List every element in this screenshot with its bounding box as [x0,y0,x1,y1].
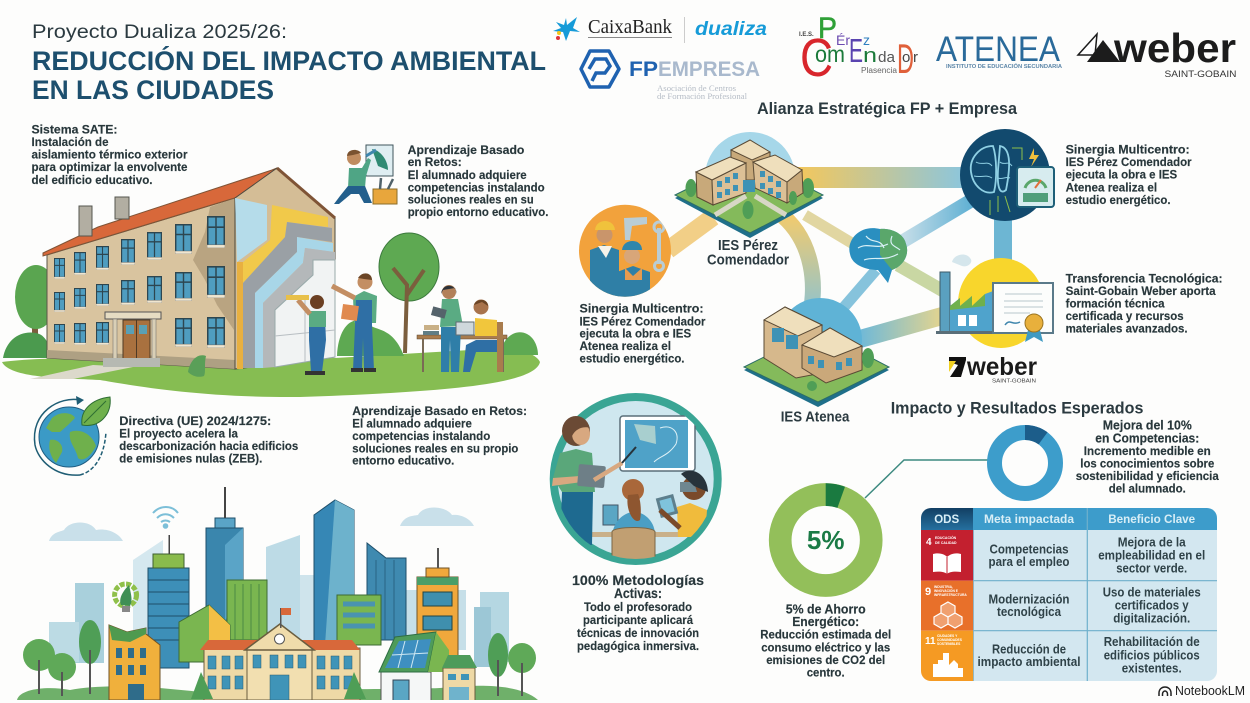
text: 100% Metodologías Activas: participante aplicará [583,613,693,627]
logo: IES Pérez Comendador: om [815,41,845,67]
label: IES Atenea: IES Atenea [781,409,850,426]
table column: Beneficio Clave: Rehabilitación de [1104,635,1200,649]
icon: worker installing panel [334,145,397,204]
green mid buildings [227,580,381,645]
ODS 11 cell [921,631,974,682]
text: 100% Metodologías Activas: técnicas de innovación [577,626,699,640]
label: IES Pérez Comendador: Comendador [707,252,789,268]
chart: 5% energy saving donut [780,483,871,586]
table column: Beneficio Clave: existentes. [1122,661,1182,675]
text: Sistema SATE: Instalación de [32,135,109,149]
text: 100% Metodologías Activas: 100% Metodologías [572,572,704,588]
icon: gear with bulb [115,584,137,612]
logo: IES Pérez Comendador: E [849,32,863,69]
gable end with insulation layers [235,168,335,369]
label: IES Pérez Comendador [707,237,789,268]
ODS 9 cell: INNOVACIÓN E [934,588,959,593]
text: Aprendizaje Basado en Retos (top) [408,143,548,219]
text: Aprendizaje Basado en Retos (bottom): soluciones reales en su propio [352,441,518,455]
logo: IES Pérez Comendador: C [800,28,833,88]
ODS 9 cell: 9 [925,586,931,598]
logo: IES Pérez Comendador: Plasencia [861,66,898,75]
ODS 11 cell: COMUNIDADES [937,638,963,642]
wall base band [47,350,235,369]
logo: CaixaBank dualiza: CaixaBank [588,16,672,38]
title [32,21,546,105]
heading: Impacto y Resultados: Impacto y Resultados Esperados [891,398,1143,417]
ODS 11 cell: CIUDADES Y [937,634,958,638]
text: Transferencia Tecnológica: Saint-Gobain Weber aporta [1066,284,1216,298]
illustration: green city skyline [17,487,538,702]
ODS 11 cell: SOSTENIBLES [937,642,961,646]
logo: FP Empresa: de Formación Profesional [657,91,748,101]
logo: IES Pérez Comendador: D [897,35,914,82]
teacher [552,416,636,492]
text: Directiva UE: de emisiones nulas (ZEB). [119,452,262,466]
table header [934,512,1196,526]
table column: Beneficio Clave: Mejora de la [1118,536,1187,550]
text: Sistema SATE: para optimizar la envolvente [32,160,188,174]
logo: IES Atenea: INSTITUTO DE EDUCACIÓN SECUNDARIA [946,62,1062,70]
NotebookLM mark: NotebookLM [1175,683,1245,698]
small house [442,655,477,702]
front wall [47,198,235,369]
table column: Beneficio Clave: Uso de materiales [1103,586,1201,600]
icon: construction workers [579,205,671,300]
text: Aprendizaje Basado en Retos (top): competencias instalando [408,181,545,195]
logo: Weber small: weber [966,353,1037,381]
text: Sinergia Multicentro (right): Sinergia Multicentro: [1066,142,1190,156]
logo: IES Pérez Comendador [799,12,918,88]
logo: FP Empresa: EMPRESA [658,58,760,81]
label: IES Pérez Comendador: IES Pérez [718,237,778,254]
table column: Beneficio Clave: digitalización. [1113,612,1190,626]
text: Aprendizaje Basado en Retos (bottom): El alumnado adquiere [352,416,472,430]
icon: IES Atenea school [744,298,889,407]
table column: Beneficio Clave: edificios públicos [1104,648,1200,662]
heading: Alianza Estratégica: Alianza Estratégica FP + Empresa [757,99,1018,118]
text: Sinergia Multicentro (right) [1066,142,1192,207]
background buildings [49,535,509,667]
text: Mejora del 10%: Incremento medible en [1084,444,1211,458]
table column: Meta impactada: tecnológica [997,605,1062,619]
text: Transferencia Tecnológica [1066,271,1223,335]
title: REDUCCIÓN DEL IMPACTO AMBIENTAL [32,46,546,76]
text: Mejora del 10%: del alumnado. [1109,482,1186,496]
table column: Beneficio Clave: certificados y [1115,598,1189,612]
connector line between donuts [865,460,988,498]
logo: IES Pérez Comendador: I.E.S. [799,32,814,38]
rubble [188,355,206,377]
logo: Weber small: SAINT-GOBAIN [992,379,1036,385]
text: Sistema SATE [32,122,188,187]
icon: factory with certificate [936,255,1053,348]
path [30,365,133,379]
text: Transferencia Tecnológica: materiales avanzados. [1066,321,1188,335]
logo: Weber Saint-Gobain: weber [1113,25,1236,71]
roof house buildings [109,605,230,700]
text: Sistema SATE: Sistema SATE: [32,122,118,136]
illustration: school building with SATE insulation [2,168,540,397]
text: Sinergia Multicentro (right): ejecuta la obra e IES [1066,168,1177,182]
table header: Beneficio Clave [1108,512,1196,526]
logo: FP Empresa [581,51,760,101]
logo: IES Atenea: ATENEA [936,30,1061,69]
text: Mejora del 10%: Mejora del 10% [1103,418,1192,432]
table column: Beneficio Clave: sector verde. [1116,561,1187,575]
left trees and bushes [3,265,57,358]
text: Directiva UE: descarbonización hacia edificios [119,439,299,453]
text: Directiva UE: Directiva (UE) 2024/1275: [119,414,271,428]
icon: energy study brain and gauge [960,129,1054,221]
table header: Meta impactada [984,512,1074,526]
entrance door [103,312,161,367]
chart: 10% competencies donut [994,425,1056,494]
text: Sinergia Multicentro (left) [580,302,706,366]
damaged wall [193,198,235,330]
text: Aprendizaje Basado en Retos (top): Aprendizaje Basado [408,143,524,157]
ODS 4 cell: EDUCACIÓN [935,535,957,540]
ODS 11 cell: 11 [925,636,936,647]
text: Sinergia Multicentro (left): estudio energético. [580,352,684,366]
logo: CaixaBank dualiza: dualiza [695,19,767,40]
text: Sinergia Multicentro (right): IES Pérez Comendador [1066,155,1192,169]
table column: Beneficio Clave [1098,536,1205,675]
icon: earth with leaf and circular arrow [34,396,110,475]
text: 100% Metodologías Activas: Todo el profesorado [584,600,692,614]
text: Sinergia Multicentro (left): Atenea realiza el [580,339,671,353]
text: 5% de Ahorro Energético: Energético: [792,615,859,629]
lawn and paths [2,348,540,397]
table column: Meta impactada [978,542,1080,669]
icon: brain network [849,228,907,283]
table column: Beneficio Clave: empleabilidad en el [1098,548,1205,562]
logo: FP Empresa: FP [629,58,658,81]
text: 5% de Ahorro Energético: centro. [807,666,845,680]
roof [43,168,277,256]
text: Transferencia Tecnológica: formación técnica [1066,297,1165,311]
table header: ODS [934,512,959,526]
logo: FP Empresa: Asociación de Centros [657,83,736,93]
logo: Weber Saint-Gobain [1078,25,1236,79]
text: Sistema SATE: aislamiento térmico exterior [32,148,188,162]
title: Proyecto Dualiza 2025/26: [32,21,287,43]
orange tower [417,548,458,657]
chimneys [79,197,129,236]
school [200,608,360,700]
text: Mejora del 10%: los conocimientos sobre [1080,456,1215,470]
logo: IES Pérez Comendador: r [913,49,918,66]
table column: Meta impactada: Competencias [990,542,1069,556]
clouds [49,507,474,541]
text: Directiva UE [119,414,299,466]
text: 5% de Ahorro Energético: emisiones de CO2 del [766,653,885,667]
ODS 4 cell: 4 [926,537,932,548]
right tree [379,233,439,353]
text: Sinergia Multicentro (right): estudio energético. [1066,193,1171,207]
icon: IES Pérez Comendador school [675,132,823,238]
text: Transferencia Tecnológica: Transforencia Tecnológica: [1066,271,1223,285]
text: Sinergia Multicentro (right): Atenea realiza el [1066,180,1157,194]
table column: Meta impactada: para el empleo [988,555,1070,569]
text: Directiva UE: El proyecto acelera la [119,427,238,441]
trees [23,620,536,699]
text: Aprendizaje Basado en Retos (top): El alumnado adquiere [408,168,527,182]
text: Aprendizaje Basado en Retos (top): soluciones reales en su [408,192,534,206]
windows [54,217,225,348]
text: Sistema SATE: del edificio educativo. [32,173,152,187]
logo: IES Pérez Comendador: o [902,49,910,66]
text: Aprendizaje Basado en Retos (top): propio entorno educativo. [408,205,548,219]
students and table [417,285,507,372]
text: 100% Metodologías Activas: Activas: [614,585,662,601]
table column: Meta impactada: Modernización [988,592,1070,606]
worker left [286,295,326,375]
table: ODS impact [921,508,1217,682]
text: 100% Metodologías Activas [572,572,704,653]
text: 5% de Ahorro Energético [760,602,891,680]
text: Aprendizaje Basado en Retos (bottom): competencias instalando [352,429,490,443]
logo: Weber Saint-Gobain: SAINT-GOBAIN [1164,69,1236,79]
text: 5% de Ahorro Energético: consumo eléctrico y las [761,640,891,654]
icon: wifi [153,507,178,528]
ODS 4 cell: DE CALIDAD [935,541,957,545]
text: Aprendizaje Basado en Retos (bottom): entorno educativo. [352,453,454,467]
text: Aprendizaje Basado en Retos (top): en Retos: [408,155,462,169]
worker right [332,273,377,372]
text: Sinergia Multicentro (left): Sinergia Multicentro: [580,302,704,316]
logo: IES Pérez Comendador: Ér [836,32,850,48]
illustration: active methodologies classroom [552,397,718,570]
ODS 9 cell: INFRAESTRUCTURA [934,593,967,597]
text: Sinergia Multicentro (left): ejecuta la obra e IES [580,327,691,341]
text: 100% Metodologías Activas: pedagógica inmersiva. [577,639,699,653]
text: Aprendizaje Basado en Retos (bottom): Aprendizaje Basado en Retos: [352,404,527,418]
ODS 9 cell: INDUSTRIA, [934,585,953,589]
text: Mejora del 10%: sostenibilidad y eficiencia [1076,469,1219,483]
text: Mejora del 10%: en Competencias: [1095,432,1199,446]
ground bushes [17,686,538,700]
text: Mejora del 10% [1076,418,1219,496]
title: EN LAS CIUDADES [32,75,274,105]
table column: Meta impactada: impacto ambiental [978,655,1080,669]
logo: CaixaBank dualiza [553,16,767,43]
text: Aprendizaje Basado en Retos (bottom) [352,404,527,467]
ODS 4 cell [921,530,974,581]
diagram connectors [668,167,1012,339]
text: Transferencia Tecnológica: certificada y recursos [1066,309,1184,323]
ODS 9 cell [921,581,974,631]
logo: IES Pérez Comendador: P [818,12,837,45]
text: 5% de Ahorro Energético: 5% de Ahorro [786,602,866,616]
table column: Meta impactada: Reducción de [992,642,1066,656]
text: 5% de Ahorro Energético: Reducción estimada del [760,628,891,642]
solar house [379,632,449,702]
logo: IES Pérez Comendador: da [878,49,896,66]
text: Sinergia Multicentro (left): IES Pérez Comendador [580,314,706,328]
logo: IES Pérez Comendador: z [863,32,870,48]
chart: 5% energy saving donut: 5% [807,525,844,555]
bushes [337,320,538,356]
tall blue towers [148,487,406,668]
logo: Weber small [949,353,1037,385]
logo: IES Pérez Comendador: n [863,45,877,67]
